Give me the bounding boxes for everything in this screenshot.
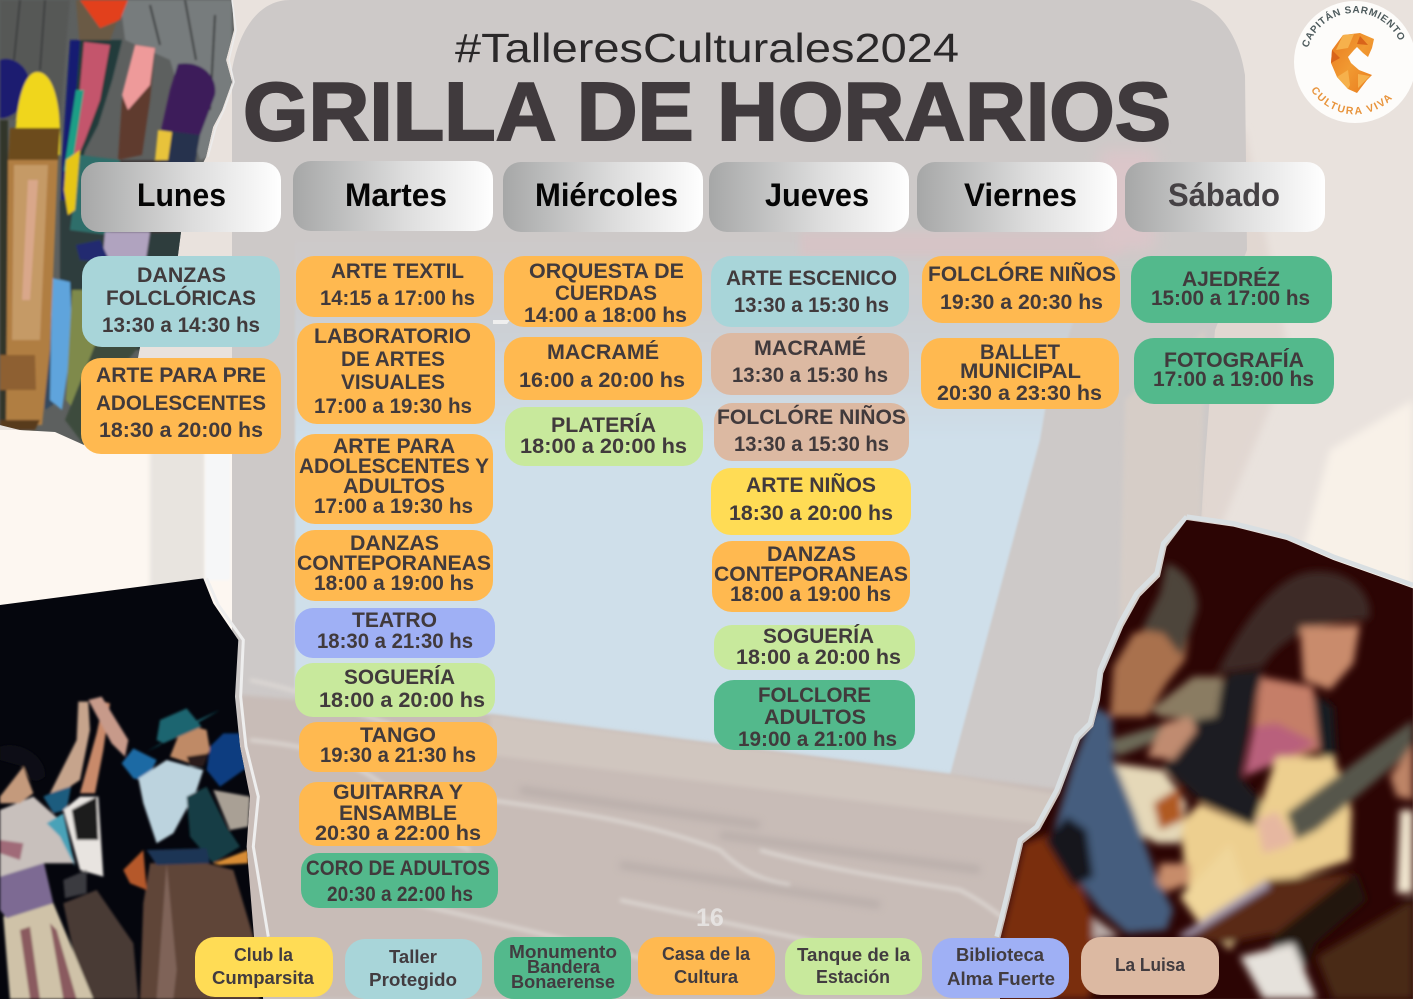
legend: venues	[195, 937, 1219, 999]
card: Arte escenico: ARTE ESCENICO	[726, 267, 897, 290]
venue: Casa de la Cultura	[638, 937, 775, 995]
card: Arte para adolescentes y adultos: 17:00 a 19:30 hs	[314, 495, 473, 518]
column: Viernes	[921, 256, 1120, 409]
card: Platería: PLATERÍA	[551, 414, 656, 437]
venue: La Luisa	[1081, 937, 1219, 995]
card: Danzas Folclóricas: DANZAS	[137, 264, 226, 287]
day header: Viernes: Viernes	[964, 177, 1077, 213]
column: Sábado	[1131, 256, 1334, 404]
column: Martes	[295, 256, 498, 908]
card: Arte para pre adolescentes: 18:30 a 20:00 hs	[99, 419, 263, 442]
card: Folclóre niños	[922, 256, 1120, 323]
card: Folclore adultos	[714, 680, 915, 751]
venue: Club la Cumparsita	[195, 937, 333, 997]
card: Danzas conteporaneas: 18:00 a 19:00 hs	[314, 572, 474, 595]
card: Ballet municipal: BALLET	[980, 341, 1060, 364]
day header: Sábado	[1125, 162, 1325, 232]
card: Soguería: SOGUERÍA	[344, 666, 455, 689]
photo: guitar players	[997, 510, 1413, 999]
card: Arte textil: 14:15 a 17:00 hs	[320, 287, 475, 310]
card: Macramé	[711, 333, 909, 395]
card: Danzas Folclóricas: 13:30 a 14:30 hs	[102, 314, 260, 337]
day header: Martes: Martes	[345, 177, 447, 213]
venue: Taller Protegido: Protegido	[369, 970, 457, 990]
card: Arte textil	[296, 256, 493, 317]
venue: Monumento Bandera Bonaerense: Monumento	[509, 942, 617, 962]
card: Danzas Folclóricas	[82, 256, 280, 347]
venue: Biblioteca Alma Fuerte	[932, 938, 1069, 998]
card: Arte niños	[711, 468, 911, 535]
logo: Capitán Sarmiento Cultura Viva: CULTURA VIVA	[1312, 87, 1392, 114]
card: Ballet municipal: MUNICIPAL	[960, 360, 1081, 383]
day header: Lunes: Lunes	[137, 177, 226, 213]
icon: horse head C	[1331, 33, 1374, 93]
card: Orquesta de cuerdas: 14:00 a 18:00 hs	[524, 304, 687, 327]
venue: Monumento Bandera Bonaerense: Bonaerense	[511, 972, 615, 992]
card: Coro de adultos: CORO DE ADULTOS	[306, 857, 490, 880]
card: Orquesta de cuerdas	[504, 256, 702, 327]
card: Folclóre niños: 19:30 a 20:30 hs	[940, 291, 1103, 314]
card: Arte para adolescentes y adultos: ARTE PARA	[333, 435, 455, 458]
card: Fotografía	[1134, 338, 1334, 404]
background: faded theatre: 16	[696, 904, 724, 932]
card: Teatro: TEATRO	[352, 609, 437, 632]
card: Macramé: 16:00 a 20:00 hs	[519, 369, 685, 392]
subtitle: hashtag: #TalleresCulturales2024	[455, 25, 959, 71]
day header: Lunes	[81, 162, 281, 232]
card: Laboratorio de artes visuales: DE ARTES	[341, 348, 445, 371]
card: Fotografía: 17:00 a 19:00 hs	[1153, 368, 1314, 391]
card: Danzas conteporaneas	[295, 530, 493, 601]
card: Danzas conteporaneas: DANZAS	[767, 543, 856, 566]
card: Arte escenico: 13:30 a 15:30 hs	[734, 294, 889, 317]
venue: Biblioteca Alma Fuerte: Biblioteca	[956, 945, 1045, 965]
card: Ballet municipal: 20:30 a 23:30 hs	[937, 382, 1102, 405]
card: Orquesta de cuerdas: ORQUESTA DE	[529, 260, 684, 283]
day header: Jueves: Jueves	[765, 177, 869, 213]
photo: paint brushes	[0, 0, 240, 450]
card: Folclóre niños: 13:30 a 15:30 hs	[734, 433, 889, 456]
venue: Biblioteca Alma Fuerte: Alma Fuerte	[947, 969, 1055, 989]
venue: Casa de la Cultura: Cultura	[674, 967, 739, 987]
venue: Casa de la Cultura: Casa de la	[662, 944, 751, 964]
day header: Miércoles	[503, 162, 703, 232]
torn paper edge: brushes	[208, 0, 236, 157]
card: Laboratorio de artes visuales: 17:00 a 19:30 hs	[314, 395, 472, 418]
venue: Club la Cumparsita: Club la	[234, 945, 294, 965]
card: Arte para adolescentes y adultos	[295, 434, 493, 524]
card: Danzas conteporaneas: CONTEPORANEAS	[714, 563, 908, 586]
card: Arte para pre adolescentes	[81, 358, 281, 454]
card: Tango	[299, 722, 497, 772]
column: Miércoles	[504, 256, 703, 466]
card: Folclore adultos: ADULTOS	[764, 706, 866, 729]
day header: Miércoles: Miércoles	[535, 177, 678, 213]
card: Teatro: 18:30 a 21:30 hs	[317, 630, 473, 653]
card: Laboratorio de artes visuales	[297, 323, 495, 424]
card: Arte para pre adolescentes: ADOLESCENTES	[96, 392, 266, 415]
venue: Tanque de la Estación: Estación	[816, 967, 890, 987]
card: Arte niños: ARTE NIÑOS	[746, 474, 876, 497]
card: Guitarra y ensamble	[299, 781, 497, 846]
card: Fotografía: FOTOGRAFÍA	[1164, 349, 1304, 372]
card: Soguería	[295, 663, 495, 717]
venue: Tanque de la Estación: Tanque de la	[797, 945, 911, 965]
card: Folclóre niños	[714, 403, 909, 461]
card: Arte para pre adolescentes: ARTE PARA PRE	[96, 364, 266, 387]
card: Danzas conteporaneas: CONTEPORANEAS	[297, 552, 491, 575]
card: Guitarra y ensamble: 20:30 a 22:00 hs	[315, 822, 481, 845]
card: Macramé: 13:30 a 15:30 hs	[732, 364, 888, 387]
card: Arte para adolescentes y adultos: ADULTOS	[343, 475, 445, 498]
venue: Taller Protegido: Taller	[389, 947, 437, 967]
column: Jueves	[711, 256, 915, 751]
card: Folclóre niños: FOLCLÓRE NIÑOS	[928, 262, 1116, 286]
card: Laboratorio de artes visuales: VISUALES	[341, 371, 445, 394]
card: Soguería: 18:00 a 20:00 hs	[319, 689, 485, 712]
logo: Capitán Sarmiento Cultura Viva: CAPITÁN SARMIENTO	[1302, 6, 1404, 47]
day header: Viernes	[917, 162, 1117, 232]
card: Orquesta de cuerdas: CUERDAS	[555, 282, 657, 305]
column: Lunes	[81, 256, 281, 454]
card: Danzas conteporaneas: DANZAS	[350, 532, 439, 555]
venue: La Luisa: La Luisa	[1115, 955, 1186, 975]
card: Tango: TANGO	[360, 724, 436, 747]
card: Ajedréz: 15:00 a 17:00 hs	[1151, 287, 1310, 310]
photo: folklore dancers	[0, 570, 268, 999]
card: Soguería: SOGUERÍA	[763, 625, 874, 648]
card: Coro de adultos: 20:30 a 22:00 hs	[327, 883, 473, 906]
card: Macramé	[504, 337, 702, 400]
card: Danzas conteporaneas: 18:00 a 19:00 hs	[730, 583, 891, 606]
card: Arte textil: ARTE TEXTIL	[331, 260, 464, 283]
card: Folclóre niños: FOLCLÓRE NIÑOS	[717, 405, 906, 429]
card: Teatro	[295, 608, 495, 658]
card: Danzas Folclóricas: FOLCLÓRICAS	[106, 286, 256, 310]
card: Macramé: MACRAMÉ	[754, 337, 866, 360]
day header: Sábado: Sábado	[1168, 177, 1280, 213]
card: Guitarra y ensamble: GUITARRA Y	[333, 781, 463, 804]
card: Arte niños: 18:30 a 20:00 hs	[729, 502, 893, 525]
venue: Monumento Bandera Bonaerense: Bandera	[527, 957, 601, 977]
card: Platería	[505, 407, 703, 466]
venue: Monumento Bandera Bonaerense	[494, 937, 631, 999]
title: Grilla de Horarios: GRILLA DE HORARIOS	[243, 65, 1171, 158]
card: Laboratorio de artes visuales: LABORATORIO	[314, 325, 471, 348]
card: Arte para adolescentes y adultos: ADOLESCENTES Y	[299, 455, 489, 478]
card: Folclore adultos: FOLCLORE	[758, 684, 871, 707]
card: Soguería: 18:00 a 20:00 hs	[736, 646, 901, 669]
card: Tango: 19:30 a 21:30 hs	[320, 744, 476, 767]
card: Soguería	[714, 625, 915, 670]
venue: Club la Cumparsita: Cumparsita	[212, 968, 315, 988]
card: Platería: 18:00 a 20:00 hs	[520, 435, 687, 458]
venue: Taller Protegido	[345, 939, 482, 999]
card: Danzas conteporaneas	[712, 541, 910, 612]
day header: Jueves	[709, 162, 909, 232]
day header: Martes	[293, 161, 493, 231]
card: Arte escenico	[711, 256, 909, 327]
logo: Capitán Sarmiento Cultura Viva	[1294, 1, 1413, 123]
card: Ajedréz	[1131, 256, 1332, 323]
card: Coro de adultos	[301, 853, 498, 908]
card: Macramé: MACRAMÉ	[547, 341, 659, 364]
card: Ballet municipal	[921, 338, 1119, 409]
card: Guitarra y ensamble: ENSAMBLE	[339, 802, 457, 825]
card: Ajedréz: AJEDRÉZ	[1182, 268, 1280, 291]
card: Folclore adultos: 19:00 a 21:00 hs	[738, 728, 897, 751]
venue: Tanque de la Estación	[785, 938, 922, 995]
